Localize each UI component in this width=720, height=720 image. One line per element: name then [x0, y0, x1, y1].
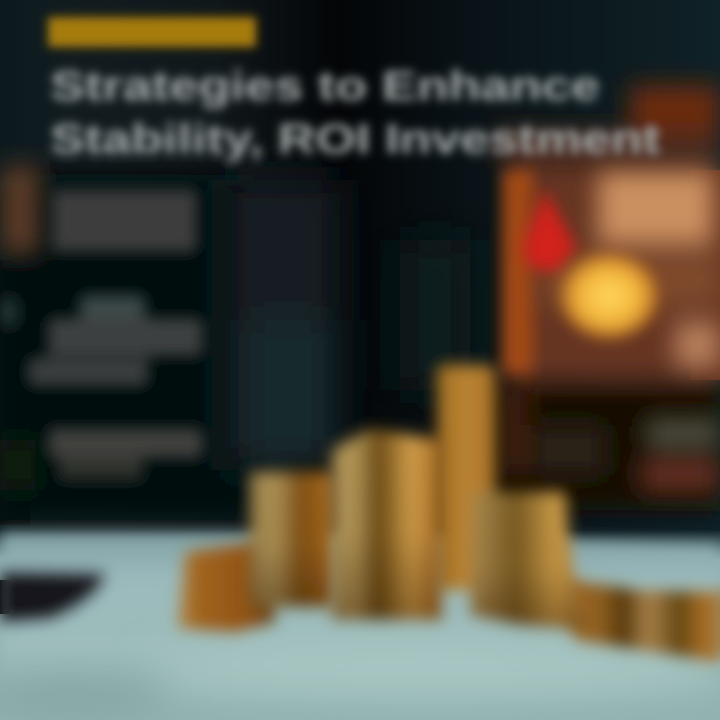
- coin stack F: [560, 578, 720, 662]
- coin stack C: [332, 428, 442, 620]
- table base: [0, 530, 720, 720]
- shelf body: [490, 85, 720, 510]
- shelf with warm objects: [490, 85, 720, 510]
- tan boxes: [545, 172, 720, 368]
- table surface: [0, 532, 720, 720]
- coin stack D: [437, 365, 495, 590]
- left warm object: [0, 165, 40, 490]
- coin stack edge base: [695, 580, 720, 665]
- coin stack B: [250, 472, 335, 607]
- title: Stability, ROI Investment: [50, 115, 660, 162]
- coin stack A: [178, 540, 275, 632]
- text block: item 2: [0, 295, 203, 386]
- dish edge: [0, 580, 12, 614]
- title: Strategies to Enhance: [50, 62, 600, 109]
- left edge dark base: [0, 260, 30, 525]
- shelf edge base: [690, 170, 720, 380]
- title: [50, 62, 660, 162]
- glowing lamp: [561, 254, 657, 338]
- lower shelf items: [505, 385, 720, 492]
- dark teal figure in the centre: [225, 180, 470, 470]
- red object: [522, 190, 576, 272]
- badge: [48, 17, 256, 47]
- table sheen: [150, 642, 710, 694]
- table shadow lower left: [0, 675, 170, 715]
- orange post: [503, 170, 533, 375]
- text block: item 3: [48, 428, 203, 480]
- dark band under the text column: [0, 175, 255, 520]
- coin stack E: [470, 492, 585, 630]
- dark dish on the table: [0, 572, 105, 622]
- coin stacks: [178, 365, 720, 662]
- text block: item 1: [52, 190, 197, 252]
